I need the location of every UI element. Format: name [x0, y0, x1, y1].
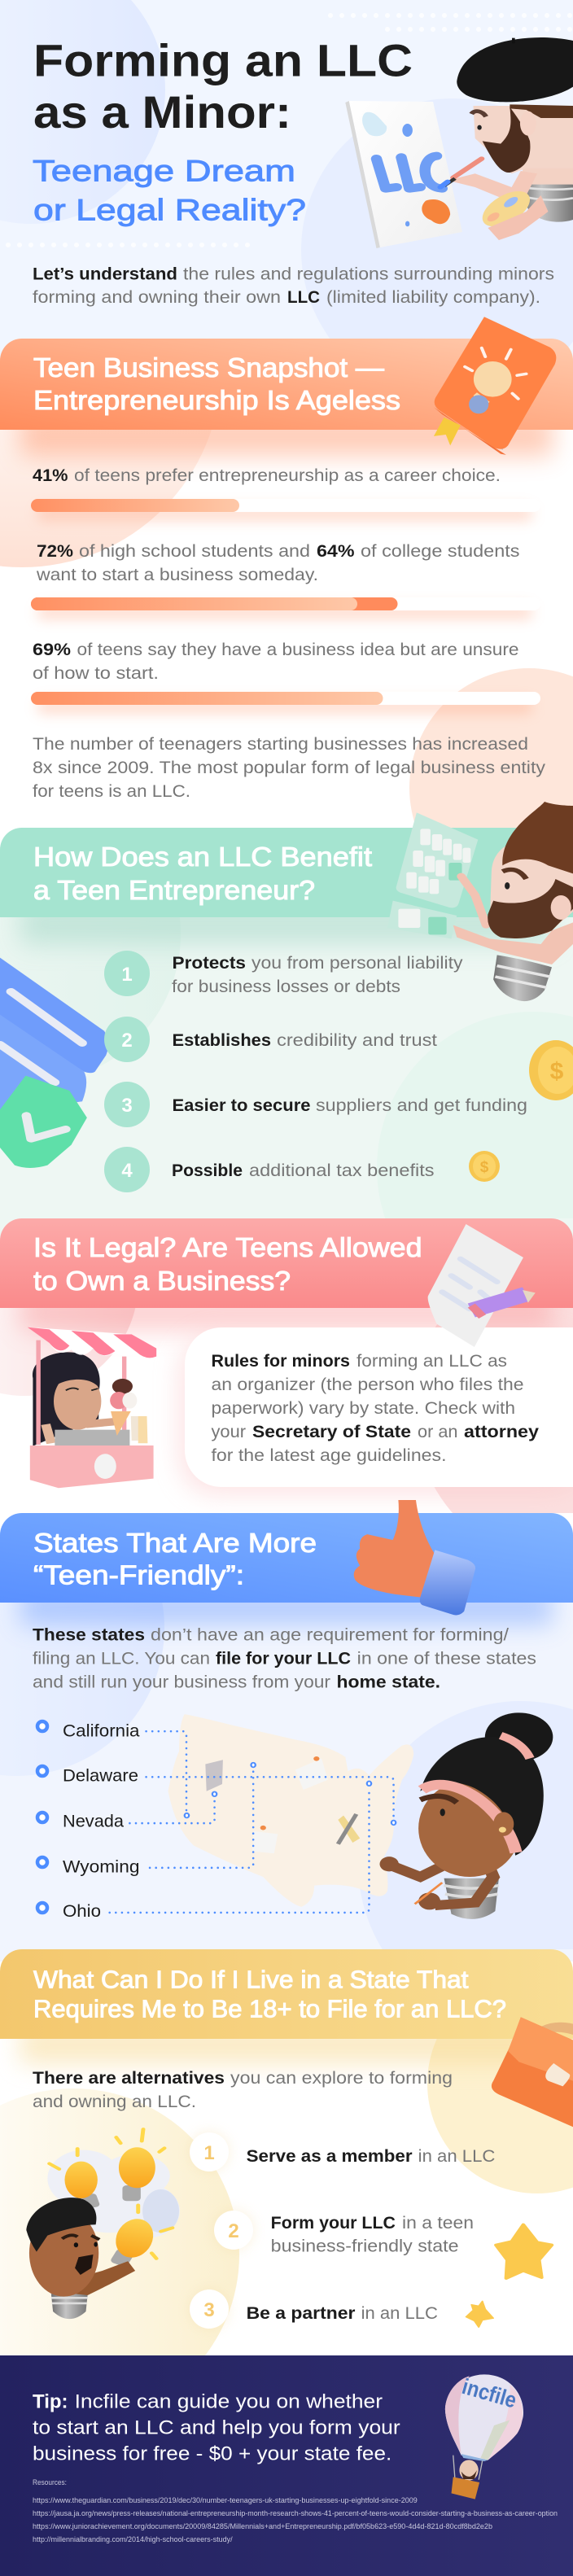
- text card: rules for minors: your: [212, 1423, 246, 1441]
- intro text: LLC: [287, 288, 320, 307]
- option 2: in a teen: [402, 2214, 474, 2233]
- illustration: girl with hair bun pointing at map: [380, 1712, 553, 1919]
- option 3: 3: [203, 2299, 215, 2321]
- benefit 4: additional tax benefits: [249, 1161, 435, 1180]
- heading band: States That Are More: [33, 1528, 317, 1558]
- panel: tip and resources: [0, 2355, 573, 2576]
- intro text: these states: These states: [33, 1626, 145, 1644]
- intro text: (limited liability company).: [326, 288, 540, 307]
- icon: stars: [466, 2224, 552, 2327]
- benefit 1: 1: [121, 964, 133, 986]
- resources list: https://www.theguardian.com/business/2019/dec/30/number-teenagers-uk-starting-businesses-up-eightfold-since-2009: [33, 2496, 418, 2505]
- paragraph: growth of teen businesses: 8x since 2009. The most popular form of legal business entity: [33, 759, 546, 777]
- illustration: map of the United States: [168, 1714, 413, 1907]
- option 1: 1: [203, 2142, 215, 2164]
- stat: 41%: [31, 466, 540, 521]
- panel: teen-friendly states: [0, 1500, 573, 1962]
- paragraph: growth of teen businesses: for teens is an LLC.: [33, 782, 190, 801]
- stat: 69%: [31, 641, 540, 714]
- icon: coins: $: [550, 1058, 564, 1085]
- heading band: [0, 1513, 573, 1603]
- tip text: business for free - $0 + your state fee.: [33, 2443, 391, 2464]
- text card: rules for minors: [179, 1327, 573, 1494]
- intro text: alternatives: [33, 2069, 453, 2111]
- resources list: [33, 2478, 558, 2544]
- title: as a Minor:: [33, 86, 291, 138]
- tip text: to start an LLC and help you form your: [33, 2417, 400, 2438]
- tip text: Incfile can guide you on whether: [75, 2391, 383, 2412]
- stat: 69%: of how to start.: [33, 664, 159, 683]
- intro text: alternatives: There are alternatives: [33, 2069, 225, 2088]
- intro text: forming and owning their own: [33, 288, 281, 307]
- heading band: “Teen-Friendly”:: [33, 1559, 244, 1590]
- benefit 2: [104, 1017, 437, 1062]
- state list: California: [63, 1722, 140, 1740]
- benefit 1: you from personal liability: [252, 954, 463, 973]
- intro text: these states: and still run your business from your: [33, 1673, 330, 1691]
- benefit 1: [104, 951, 463, 996]
- option 2: business-friendly state: [271, 2237, 459, 2256]
- option 2: Form your LLC: [271, 2214, 396, 2233]
- subtitle: [33, 155, 306, 226]
- icon: paper and pencil: [428, 1224, 536, 1347]
- text card: rules for minors: paperwork) vary by state. Check with: [212, 1399, 515, 1418]
- subtitle: or Legal Reality?: [33, 194, 306, 226]
- option 3: [190, 2290, 438, 2329]
- intro text: alternatives: you can explore to forming: [230, 2069, 453, 2088]
- text card: rules for minors: Secretary of State: [252, 1423, 411, 1441]
- intro text: Let’s understand: [33, 265, 177, 283]
- illustration: painter painting LLC on canvas: [345, 37, 573, 248]
- benefit 3: Easier to secure: [173, 1096, 311, 1115]
- stat: 69%: 69%: [33, 641, 71, 659]
- intro text: these states: in one of these states: [357, 1649, 536, 1668]
- stat: 72% and 64%: 64%: [317, 542, 355, 561]
- benefit 3: 3: [121, 1095, 133, 1117]
- heading band: [0, 339, 573, 430]
- illustration: girl at ice cream stand: [28, 1327, 156, 1488]
- option 3: in an LLC: [361, 2304, 438, 2323]
- intro text: these states: file for your LLC: [216, 1649, 351, 1668]
- benefit 4: 4: [121, 1160, 133, 1182]
- state list: Nevada: [63, 1812, 124, 1831]
- icon: thumbs up: [354, 1500, 475, 1615]
- benefit 1: for business losses or debts: [172, 977, 400, 996]
- benefit 1: Protects: [173, 954, 246, 973]
- heading band: What Can I Do If I Live in a State That: [33, 1965, 469, 1994]
- option 2: 2: [228, 2220, 239, 2242]
- state list: Delaware: [63, 1766, 138, 1786]
- heading band: Is It Legal? Are Teens Allowed: [33, 1232, 422, 1262]
- benefit 3: suppliers and get funding: [316, 1096, 527, 1115]
- stat: 72% and 64%: of high school students and: [79, 542, 310, 561]
- option 3: Be a partner: [247, 2304, 355, 2323]
- benefit 3: [104, 1082, 527, 1127]
- option 1: [190, 2132, 495, 2171]
- illustration: bearded character using calculator: [387, 802, 573, 1001]
- canvas: [345, 101, 462, 248]
- heading band: Teen Business Snapshot —: [33, 352, 384, 383]
- illustration: man with light bulb ideas: [26, 2129, 180, 2319]
- heading band: Entrepreneurship Is Ageless: [33, 385, 400, 415]
- background: intro section: [0, 0, 573, 407]
- heading band: [0, 1218, 573, 1308]
- benefit 2: Establishes: [173, 1031, 271, 1050]
- benefit 4: [104, 1147, 435, 1192]
- intro text: alternatives: and owning an LLC.: [33, 2093, 196, 2111]
- stat: 41%: of teens prefer entrepreneurship as a career choice.: [74, 466, 501, 485]
- heading band: a Teen Entrepreneur?: [33, 875, 315, 905]
- benefit 2: 2: [121, 1030, 133, 1052]
- intro text: these states: don’t have an age requirement for forming/: [151, 1626, 509, 1644]
- heading band: How Does an LLC Benefit: [33, 842, 372, 872]
- title: [33, 34, 413, 138]
- dotted connectors from states to map: [110, 1731, 396, 1913]
- icon: briefcase: [492, 2017, 573, 2127]
- heading band: [0, 828, 573, 917]
- benefit 2: credibility and trust: [277, 1031, 437, 1050]
- resources list: Resources:: [33, 2478, 67, 2487]
- title: Forming an LLC: [33, 34, 413, 86]
- tip text: [33, 2391, 400, 2464]
- illustration: Incfile hot air balloon: incfile: [459, 2374, 519, 2413]
- state list: Wyoming: [63, 1857, 140, 1877]
- heading band: [0, 1949, 573, 2039]
- benefit 4: Possible: [172, 1161, 243, 1180]
- illustration: document with shield: [0, 958, 108, 1168]
- stat: 69%: of teens say they have a business idea but are unsure: [77, 641, 519, 659]
- resources list: http://millennialbranding.com/2014/high-school-careers-study/: [33, 2535, 233, 2544]
- subtitle: Teenage Dream: [33, 155, 295, 187]
- illustration: Incfile hot air balloon: [445, 2374, 523, 2499]
- state list: [37, 1721, 140, 1921]
- icon: coins: [469, 1040, 573, 1182]
- text card: rules for minors: Rules for minors: [212, 1352, 350, 1371]
- intro text: the rules and regulations surrounding minors: [183, 265, 554, 283]
- intro text: these states: filing an LLC. You can: [33, 1649, 210, 1668]
- text card: rules for minors: for the latest age guidelines.: [212, 1446, 446, 1465]
- text card: rules for minors: or an: [418, 1423, 457, 1441]
- text card: rules for minors: forming an LLC as: [356, 1352, 507, 1371]
- icon: coins: $: [480, 1159, 489, 1176]
- option 1: in an LLC: [418, 2147, 495, 2166]
- panel: living in a state that requires 18+: [0, 1949, 573, 2355]
- intro text: [33, 265, 554, 307]
- paragraph: growth of teen businesses: The number of teenagers starting businesses has increased: [33, 735, 528, 754]
- stat: 41%: 41%: [33, 466, 68, 485]
- text card: rules for minors: attorney: [464, 1423, 539, 1441]
- option 2: [214, 2211, 474, 2256]
- stat: 72% and 64%: [31, 542, 540, 619]
- intro text: these states: [33, 1626, 536, 1691]
- text card: rules for minors: an organizer (the person who files the: [212, 1375, 524, 1394]
- paragraph: growth of teen businesses: [33, 735, 546, 801]
- character: [440, 37, 573, 240]
- resources list: https://www.juniorachievement.org/documents/20009/84285/Millennials+and+Entrepreneurship.pdf/bf05b623-e590-4d4d-821d-80cdf8bd2e2b: [33, 2522, 492, 2531]
- panel: how an LLC benefits a teen entrepreneur: [0, 802, 573, 1237]
- option 1: Serve as a member: [247, 2147, 413, 2166]
- panel: is it legal: [0, 1218, 573, 1513]
- panel: teen business snapshot: [0, 317, 573, 828]
- stat: 72% and 64%: 72%: [37, 542, 73, 561]
- tip text: Tip:: [33, 2391, 68, 2412]
- stat: 72% and 64%: want to start a business someday.: [36, 566, 318, 584]
- state list: Ohio: [63, 1902, 101, 1921]
- heading band: Requires Me to Be 18+ to File for an LLC?: [33, 1994, 506, 2023]
- heading band: to Own a Business?: [33, 1266, 291, 1296]
- intro text: these states: home state.: [337, 1673, 440, 1691]
- stat: 72% and 64%: of college students: [361, 542, 519, 561]
- icon: book with light bulb: [434, 317, 556, 455]
